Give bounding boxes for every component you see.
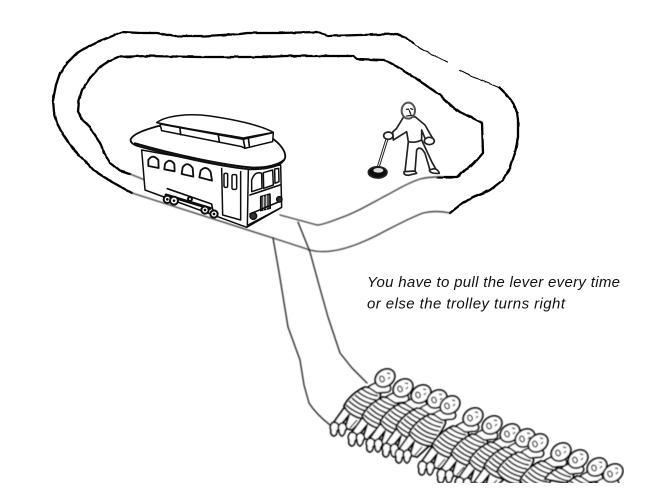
trolley clerestory	[160, 124, 273, 148]
trolley	[131, 115, 285, 227]
trolley body	[142, 150, 282, 227]
track: front curve to loop	[130, 174, 450, 252]
caption: You have to pull the lever every time	[367, 274, 620, 291]
trolley side windows	[148, 157, 212, 181]
looping track: inner rail	[78, 56, 483, 177]
caption	[367, 274, 620, 312]
trolley front grille	[261, 194, 270, 211]
trolley roof	[131, 126, 285, 169]
hands	[384, 132, 393, 139]
person body	[393, 117, 436, 172]
trolley door	[222, 168, 241, 220]
head	[402, 103, 415, 119]
trolley front windows	[252, 173, 262, 192]
lever	[368, 140, 387, 178]
trolley bumper and lights	[250, 201, 282, 214]
feet	[404, 171, 417, 175]
looping track: outer rail	[53, 32, 518, 213]
track: switch and branch to the right	[273, 222, 367, 425]
lever operator	[368, 103, 439, 178]
illustration: trolley loop problem	[52, 30, 624, 483]
trolley undercarriage and wheels	[167, 189, 213, 213]
caption: or else the trolley turns right	[367, 296, 566, 312]
crowd of people tied to the track	[328, 367, 624, 483]
